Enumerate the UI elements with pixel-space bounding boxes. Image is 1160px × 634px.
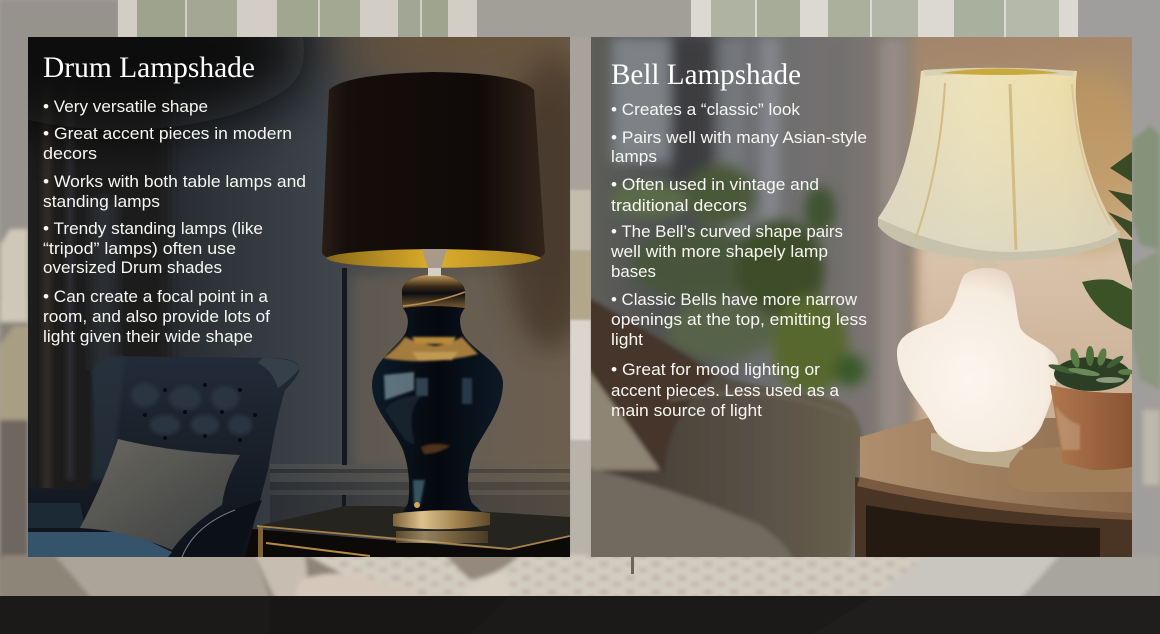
gold inner lining: [326, 249, 541, 268]
bullet list: bell lampshade: lamps: [611, 147, 657, 166]
bullet list: bell lampshade: • The Bell’s curved shape pairs: [611, 222, 843, 241]
bullet list: bell lampshade: • Classic Bells have more narrow: [611, 290, 858, 309]
side table: [855, 418, 1132, 557]
bullet list: bell lampshade: • Pairs well with many Asian-style: [611, 128, 867, 147]
bullet list: bell lampshade: accent pieces. Less used as a: [611, 381, 840, 400]
right gutter plant: [1132, 37, 1160, 557]
floor, rug and chair below the panels: [0, 555, 1160, 599]
bullet list: drum lampshade: “tripod” lamps) often use: [43, 239, 236, 258]
bell shade: [878, 68, 1120, 261]
bullet list: bell lampshade: openings at the top, emitting less: [611, 310, 867, 329]
bullet list: bell lampshade: main source of light: [611, 401, 762, 420]
bullet list: drum lampshade: • Great accent pieces in modern: [43, 124, 292, 143]
background leaves: [1082, 152, 1132, 330]
bullet list: drum lampshade: • Trendy standing lamps (like: [43, 219, 263, 238]
bullet list: bell lampshade: • Often used in vintage and: [611, 175, 819, 194]
bullet list: drum lampshade: room, and also provide lots of: [43, 307, 270, 326]
bullet list: drum lampshade: • Can create a focal point in a: [43, 287, 269, 306]
lamp base body: [372, 275, 503, 543]
sofa: [585, 296, 862, 565]
bullet list: drum lampshade: • Very versatile shape: [43, 97, 208, 116]
potted succulent: [1048, 346, 1134, 470]
bullet list: drum lampshade: decors: [43, 144, 97, 163]
left background lamp: [0, 229, 28, 600]
bullet list: drum lampshade: • Works with both table lamps and: [43, 172, 306, 191]
bullet list: drum lampshade: light given their wide shape: [43, 327, 253, 346]
armchair: [28, 356, 300, 557]
left window: [118, 0, 477, 37]
bullet list: drum lampshade: [43, 97, 306, 346]
bullet list: bell lampshade: • Great for mood lighting or: [611, 360, 820, 379]
side table: [240, 506, 570, 557]
curtain: [60, 120, 172, 490]
ceramic base: [897, 259, 1058, 468]
bullet list: drum lampshade: oversized Drum shades: [43, 258, 222, 277]
right window: [691, 0, 1078, 37]
bullet list: bell lampshade: light: [611, 330, 643, 349]
heading: Drum Lampshade: Drum Lampshade: [43, 51, 255, 84]
bell lamp: [878, 68, 1120, 468]
bullet list: bell lampshade: • Creates a “classic” look: [611, 100, 801, 119]
heading: Bell Lampshade: Bell Lampshade: [611, 58, 801, 91]
bottom dark bar: [0, 596, 1160, 634]
bullet list: bell lampshade: traditional decors: [611, 196, 747, 215]
dark area behind heading: [28, 37, 338, 154]
middle gutter: [570, 37, 591, 558]
wall background: [28, 37, 570, 557]
blurred window: [612, 37, 906, 437]
wall panel moulding: [270, 268, 570, 536]
bullet list: bell lampshade: well with more shapely lamp: [610, 242, 828, 261]
wall and curtain background: [591, 37, 1132, 557]
bullet list: bell lampshade: bases: [611, 262, 656, 281]
bullet list: drum lampshade: standing lamps: [43, 192, 160, 211]
drum lamp: [322, 72, 545, 543]
bullet list: bell lampshade: [610, 100, 867, 420]
panel: drum lampshade: [28, 37, 570, 557]
drum shade: [322, 72, 545, 267]
wooden slab: [1008, 447, 1132, 492]
blurred plant: [610, 165, 866, 395]
pillow: [80, 439, 240, 550]
panel: bell lampshade: [585, 37, 1147, 565]
